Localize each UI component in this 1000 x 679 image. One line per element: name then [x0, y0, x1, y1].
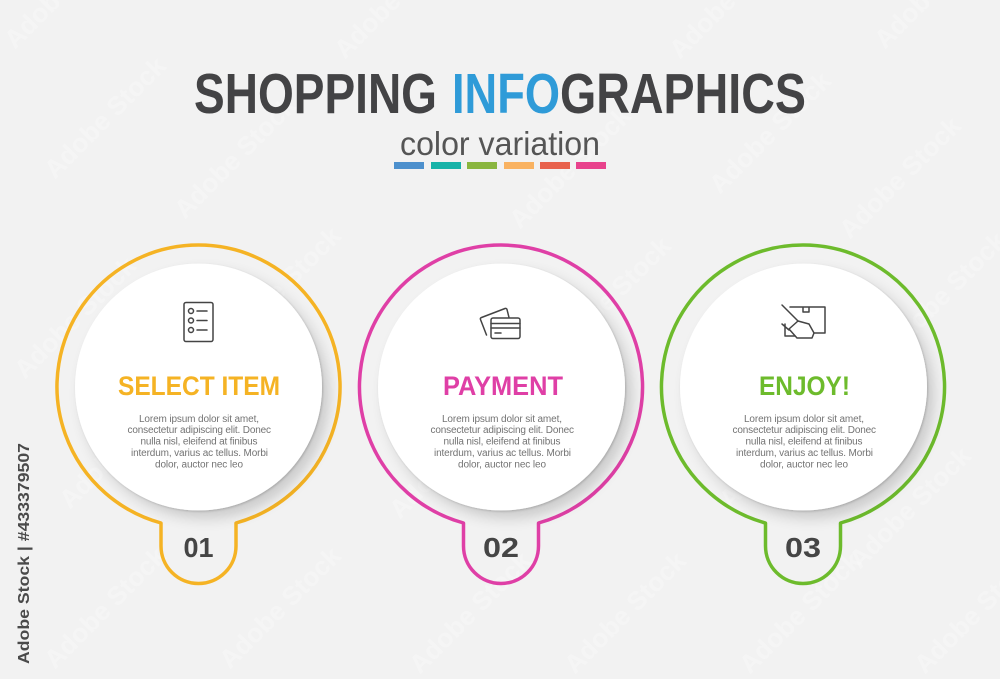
outline with number tab: [360, 245, 642, 583]
number: 03: [785, 532, 821, 563]
body text: nulla nisl, eleifend at finibus: [140, 436, 258, 448]
body text: [732, 414, 876, 470]
body text: interdum, varius ac tellus. Morbi: [434, 448, 571, 459]
white disc: [75, 264, 322, 510]
number: 02: [483, 532, 519, 563]
body text: consectetur adipiscing elit. Donec: [430, 425, 574, 436]
watermark pattern: Adobe Stock: [403, 545, 537, 679]
watermark pattern: Adobe Stock: [38, 50, 172, 184]
icon: credit cards: [480, 308, 520, 338]
title: [194, 62, 806, 126]
watermark pattern: Adobe Stock: [53, 380, 187, 514]
white disc: [378, 264, 625, 510]
watermark pattern: Adobe Stock: [843, 440, 977, 574]
watermark pattern: Adobe Stock: [703, 65, 837, 199]
body text: Lorem ipsum dolor sit amet,: [139, 414, 259, 425]
body text: dolor, auctor nec leo: [155, 460, 243, 470]
panel: step 1 select item: [57, 245, 340, 584]
title: GRAPHICS: [560, 62, 806, 126]
watermark pattern: Adobe Stock: [38, 540, 172, 674]
title: INFO: [452, 62, 560, 126]
watermark pattern: Adobe Stock: [543, 230, 677, 364]
body text: nulla nisl, eleifend at finibus: [746, 436, 862, 448]
white disc: [680, 264, 927, 510]
color variation swatches: [394, 162, 606, 169]
heading: ENJOY!: [759, 371, 850, 401]
outline with number tab: [662, 245, 944, 583]
watermark pattern: Adobe Stock: [558, 545, 692, 679]
watermark pattern: Adobe Stock: [383, 390, 517, 524]
body text: [430, 414, 574, 470]
body text: interdum, varius ac tellus. Morbi: [736, 448, 873, 459]
body text: [128, 414, 271, 470]
panel: step 2 payment: [360, 245, 642, 583]
watermark pattern: Adobe Stock: [213, 540, 347, 674]
panel: step 3 enjoy: [662, 245, 944, 583]
body text: Lorem ipsum dolor sit amet,: [442, 414, 562, 425]
watermark pattern: Adobe Stock: [168, 90, 302, 224]
body text: dolor, auctor nec leo: [458, 460, 546, 470]
stock id side label: Adobe Stock | #433379507: [16, 443, 33, 664]
title: SHOPPING: [194, 62, 437, 126]
body text: consectetur adipiscing elit. Donec: [732, 425, 876, 436]
number: 01: [184, 532, 214, 563]
watermark pattern: Adobe Stock: [833, 110, 967, 244]
body text: dolor, auctor nec leo: [760, 460, 848, 470]
body text: interdum, varius ac tellus. Morbi: [131, 448, 268, 459]
watermark pattern: Adobe Stock: [713, 380, 847, 514]
icon: hand holding box: [782, 305, 825, 338]
outline with number tab: [57, 245, 340, 584]
subtitle: color variation: [400, 125, 600, 162]
body text: Lorem ipsum dolor sit amet,: [744, 414, 864, 425]
body text: nulla nisl, eleifend at finibus: [444, 436, 560, 448]
heading: PAYMENT: [443, 371, 563, 401]
watermark pattern: Adobe Stock: [503, 100, 637, 234]
watermark pattern: Adobe Stock: [8, 250, 142, 384]
watermark pattern: Adobe Stock: [733, 545, 867, 679]
watermark pattern: Adobe Stock: [213, 220, 347, 354]
icon: checklist: [184, 302, 213, 342]
body text: consectetur adipiscing elit. Donec: [128, 425, 271, 436]
heading: SELECT ITEM: [118, 371, 280, 401]
